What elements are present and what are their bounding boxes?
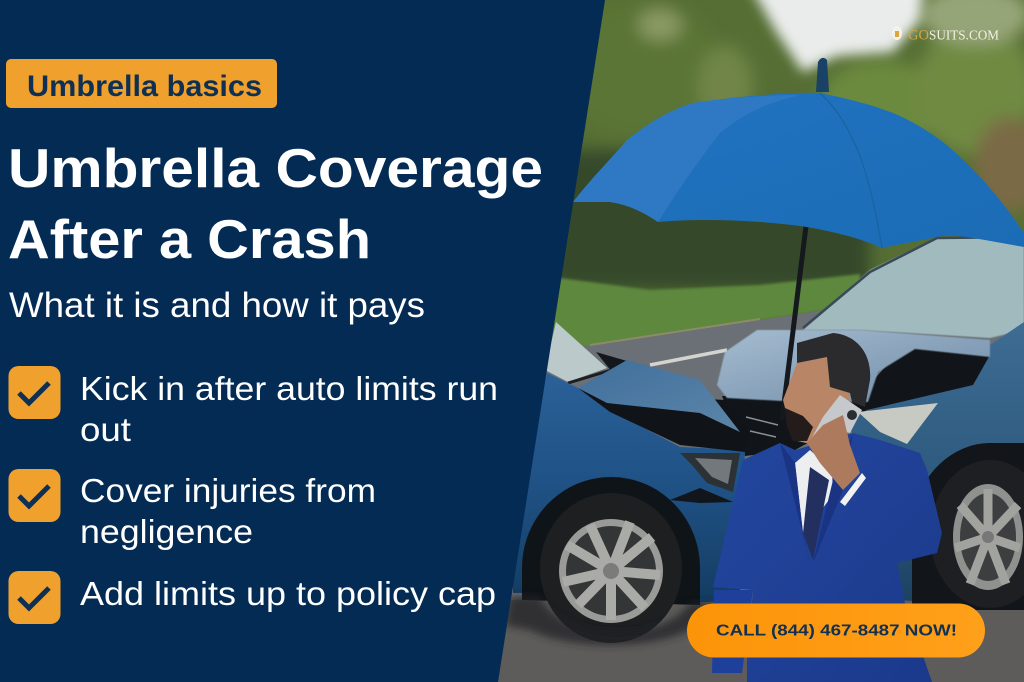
list item 1: out [80,411,131,448]
list item 2 [8,469,376,550]
badge: Umbrella basics: Umbrella basics [27,70,262,103]
beard [785,408,813,441]
tie [803,467,829,560]
right car [717,237,1024,610]
panel: navy text panel [0,0,605,682]
right lapel [813,433,853,563]
left car body [513,373,745,603]
hand [807,415,860,490]
left car [505,322,748,645]
subtitle: What it is and how it pays [9,286,425,325]
logo: GoSuits.com [892,26,999,44]
left car engine cavity [578,388,748,452]
list item 3 [8,571,496,624]
right car engine cavity [722,345,990,456]
suit left sleeve lower [712,590,753,673]
list item 3: Add limits up to policy cap [80,575,496,612]
umbrella [573,58,1024,420]
title: After a Crash [8,208,371,270]
umbrella canopy [573,93,1024,248]
photo: roadside background [480,0,1024,682]
logo: GoSuits.com: SUITS.COM [929,28,999,42]
list item 1: Kick in after auto limits run [80,370,498,407]
left car windshield [545,322,607,382]
umbrella handle tip [816,58,829,92]
logo: GoSuits.com: GO [908,28,929,44]
shirt cuff [840,473,866,506]
right wheel [912,443,1024,610]
left car hood [578,360,740,432]
left car headlight [680,453,740,492]
right car body [850,322,1024,610]
lapels [780,443,810,563]
list item 1 [8,366,498,448]
umbrella left panel [573,95,800,222]
neck and face [783,357,850,445]
road [480,300,1024,682]
title: Umbrella Coverage [8,137,543,199]
list item 2: Cover injuries from [80,472,376,509]
left wheel [522,477,700,643]
suit jacket [713,433,942,682]
call-to-action button [687,604,985,658]
title [8,137,543,270]
right car headlight [858,403,938,444]
phone [808,395,862,445]
shadow under the cars [505,596,740,645]
man in blue suit on phone [712,333,942,682]
umbrella shaft [782,226,806,420]
shirt [795,450,833,533]
sky [747,0,924,72]
list item 2: negligence [80,513,253,550]
grass verge [545,274,860,350]
right car grille chrome [746,417,778,437]
hair [797,333,870,407]
right car crumpled hood [717,330,990,402]
call-to-action button: CALL (844) 467-8487 NOW! [716,622,957,640]
right car windshield [803,238,1024,338]
badge: Umbrella basics [6,59,277,108]
